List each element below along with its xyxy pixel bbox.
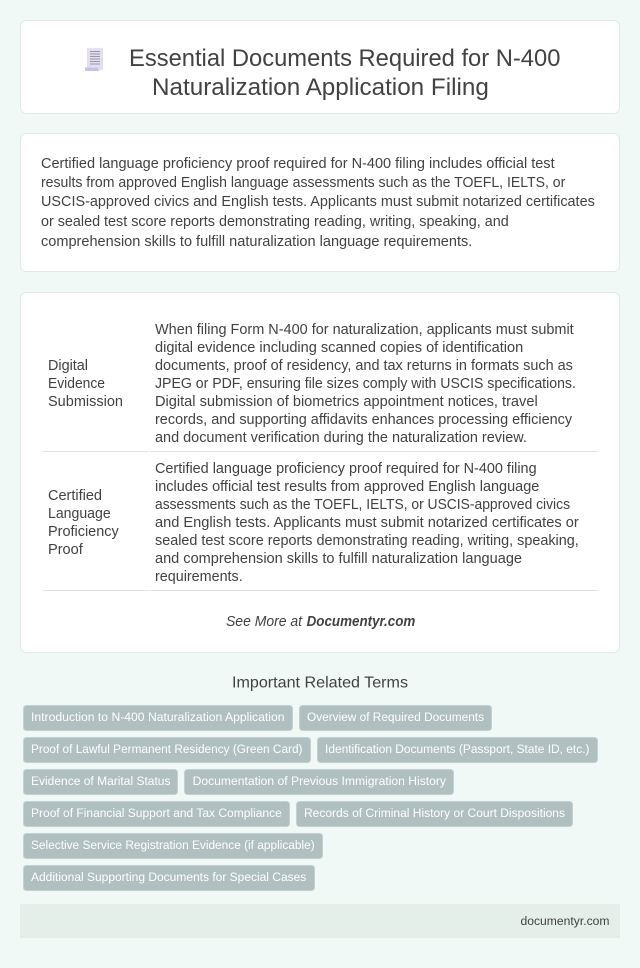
summary text: USCIS-approved civics and English tests. Applicants must submit notarized certificates (41, 194, 595, 210)
row 1 description: Digital submission of biometrics appointment notices, travel (155, 394, 538, 410)
title: Naturalization Application Filing (152, 74, 489, 101)
footer (20, 904, 620, 938)
row 1 description (155, 322, 576, 446)
row 2 description: Certified language proficiency proof required for N-400 filing (155, 461, 537, 477)
tag: criminal history: Records of Criminal History or Court Dispositions (304, 806, 565, 820)
row 2 description: requirements. (155, 569, 243, 585)
summary text: results from approved English language assessments such as the TOEFL, IELTS, or (41, 175, 566, 191)
tag: identification: Identification Documents (Passport, State ID, etc.) (325, 742, 590, 756)
tag: marital status: Evidence of Marital Status (31, 774, 170, 788)
row 1 label (48, 358, 123, 410)
see more link (226, 614, 415, 630)
summary text: comprehension skills to fulfill naturalization language requirements. (41, 234, 472, 250)
tag: overview: Overview of Required Documents (307, 710, 484, 724)
tag: introduction: Introduction to N-400 Naturalization Application (31, 710, 285, 724)
title (129, 45, 560, 101)
summary text (41, 156, 595, 250)
see more link: See More at (226, 614, 303, 630)
title: Essential Documents Required for N-400 (129, 45, 560, 72)
row 1 description: When filing Form N-400 for naturalization, applicants must submit (155, 322, 574, 338)
row 1 label: Evidence (48, 376, 105, 392)
row 2 label: Certified (48, 488, 102, 504)
panel: document table (20, 292, 620, 652)
tag: marital status (24, 770, 178, 794)
tag: permanent residency: Proof of Lawful Permanent Residency (Green Card) (31, 742, 302, 756)
row 1 description: documents, proof of residency, and tax returns in formats such as (155, 358, 573, 374)
row 2 label: Proof (48, 542, 84, 558)
row 2 description: includes official test results from approved English language (155, 479, 539, 495)
tag: financial support (24, 802, 290, 826)
tag: selective service (24, 834, 322, 858)
tag: identification (318, 738, 598, 762)
tag: financial support: Proof of Financial Support and Tax Compliance (31, 806, 282, 820)
tag list (24, 706, 598, 890)
row 2 description (155, 461, 579, 585)
summary text: or sealed test score reports demonstrating reading, writing, speaking, and (41, 214, 509, 230)
heading: related terms: Important Related Terms (232, 674, 408, 692)
tag: additional documents (24, 866, 314, 890)
panel: title card (20, 20, 620, 114)
tag: criminal history (296, 802, 572, 826)
row 1 description: and document verification during the naturalization review. (155, 430, 527, 446)
row 1 description: digital evidence including scanned copies of identification (155, 340, 523, 356)
row 2 description: assessments such as the TOEFL, IELTS, or USCIS-approved civics (155, 497, 570, 513)
row 1 description: records, and supporting affidavits enhances processing efficiency (155, 412, 573, 428)
row 2 label (48, 488, 119, 558)
tag: selective service: Selective Service Registration Evidence (if applicable) (31, 838, 315, 852)
panel: summary (20, 134, 620, 272)
see more link: Documentyr.com (307, 614, 415, 630)
footer text: documentyr.com (520, 914, 610, 928)
row 2 description: and comprehension skills to fulfill naturalization language (155, 551, 522, 567)
icon: document (85, 48, 103, 71)
row 2 label: Proficiency (48, 524, 119, 540)
row 1 description: JPEG or PDF, ensuring file sizes comply with USCIS specifications. (155, 376, 576, 392)
tag: permanent residency (24, 738, 310, 762)
tag: immigration history: Documentation of Previous Immigration History (193, 774, 447, 788)
summary text: Certified language proficiency proof required for N-400 filing includes official test (41, 156, 555, 172)
tag: overview (300, 706, 492, 730)
tag: introduction (24, 706, 292, 730)
row 2 description: sealed test score reports demonstrating reading, writing, speaking, (155, 533, 579, 549)
row 2 label: Language (48, 506, 111, 522)
row 1 label: Submission (48, 394, 123, 410)
tag: additional documents: Additional Supporting Documents for Special Cases (31, 870, 306, 884)
row 1 label: Digital (48, 358, 88, 374)
row 2 description: and English tests. Applicants must submit notarized certificates or (155, 515, 579, 531)
tag: immigration history (184, 770, 454, 794)
